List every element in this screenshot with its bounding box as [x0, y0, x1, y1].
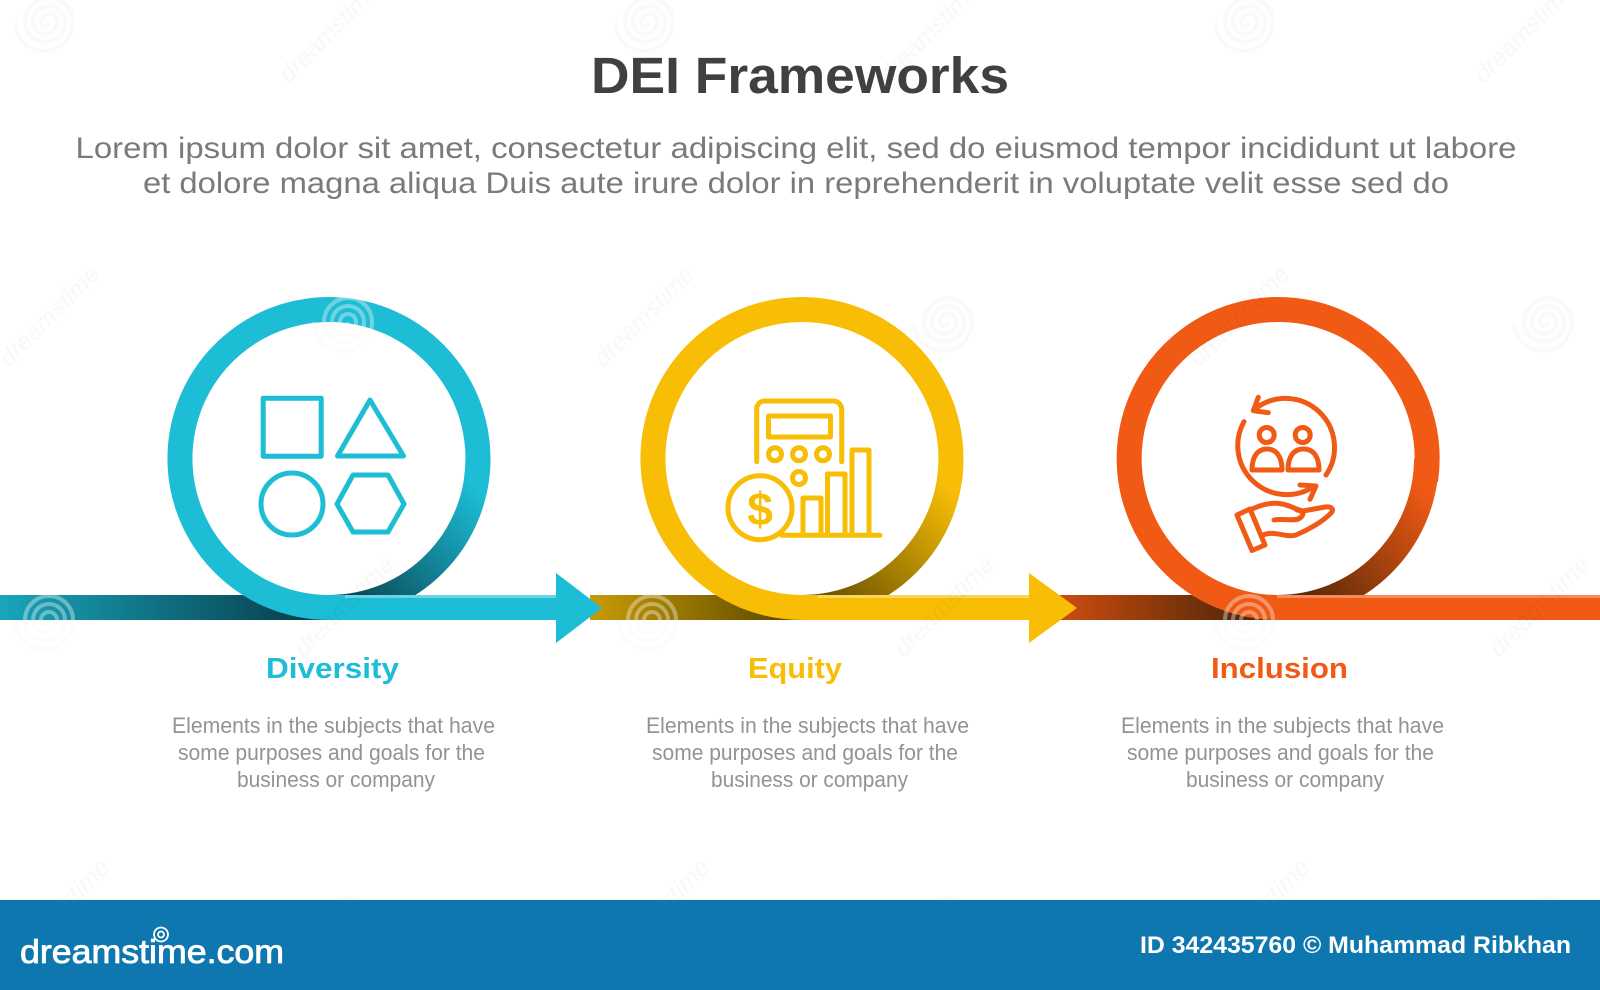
- description: Inclusion: [1121, 713, 1444, 792]
- step 3 ring and line: Inclusion: [1129, 310, 1600, 620]
- icon: calculator, coin and bars: [728, 401, 880, 540]
- watermark spirals: dreamstime: [1483, 550, 1595, 662]
- watermark spirals: dreamstime: [603, 853, 715, 965]
- description: Diversity: business or company: [237, 767, 435, 792]
- title: DEI Frameworks: [591, 47, 1009, 104]
- watermark spirals: dreamstime: [288, 550, 400, 662]
- subtitle text block: et dolore magna aliqua Duis aute irure dolor in reprehenderit in voluptate velit esse sed do: [143, 167, 1449, 200]
- description: Diversity: some purposes and goals for the: [178, 740, 485, 765]
- description: Inclusion: Elements in the subjects that have: [1121, 713, 1444, 738]
- icon: shapes: [261, 398, 404, 535]
- footer logo spiral: [154, 928, 168, 942]
- back bands of the flow line: [0, 595, 1280, 620]
- subtitle text block: Lorem ipsum dolor sit amet, consectetur adipiscing elit, sed do eiusmod tempor incididunt ut labore: [76, 132, 1516, 165]
- description: Equity: business or company: [711, 767, 908, 792]
- description: Diversity: Elements in the subjects that have: [172, 713, 495, 738]
- step 2 ring and arrow: Equity: [653, 310, 1077, 643]
- description: Equity: Elements in the subjects that have: [646, 713, 969, 738]
- label: Inclusion: Inclusion: [1211, 653, 1348, 685]
- footer logo text: dreamstime.com: [20, 933, 284, 970]
- description: Inclusion: business or company: [1186, 767, 1384, 792]
- footer bar: [0, 900, 1600, 990]
- watermark spirals: dreamstime: [3, 853, 115, 965]
- watermark spirals: dreamstime: [588, 260, 700, 372]
- icon: people cycle in hand: [1237, 397, 1334, 550]
- label: Diversity: Diversity: [266, 653, 399, 685]
- footer credit: ID 342435760 © Muhammad Ribkhan: [1140, 932, 1571, 959]
- watermark spirals: dreamstime: [888, 550, 1000, 662]
- description: Diversity: [172, 713, 495, 792]
- subtitle text block: [76, 132, 1516, 200]
- watermark spirals: dreamstime: [1183, 260, 1295, 372]
- watermark spirals: dreamstime: [1203, 853, 1315, 965]
- label: Equity: Equity: [748, 653, 842, 685]
- description: Equity: [646, 713, 969, 792]
- description: Equity: some purposes and goals for the: [652, 740, 958, 765]
- description: Inclusion: some purposes and goals for the: [1127, 740, 1434, 765]
- icon: calculator, coin and bars: $: [747, 483, 773, 535]
- step 1 ring and arrow: Diversity: [180, 310, 602, 643]
